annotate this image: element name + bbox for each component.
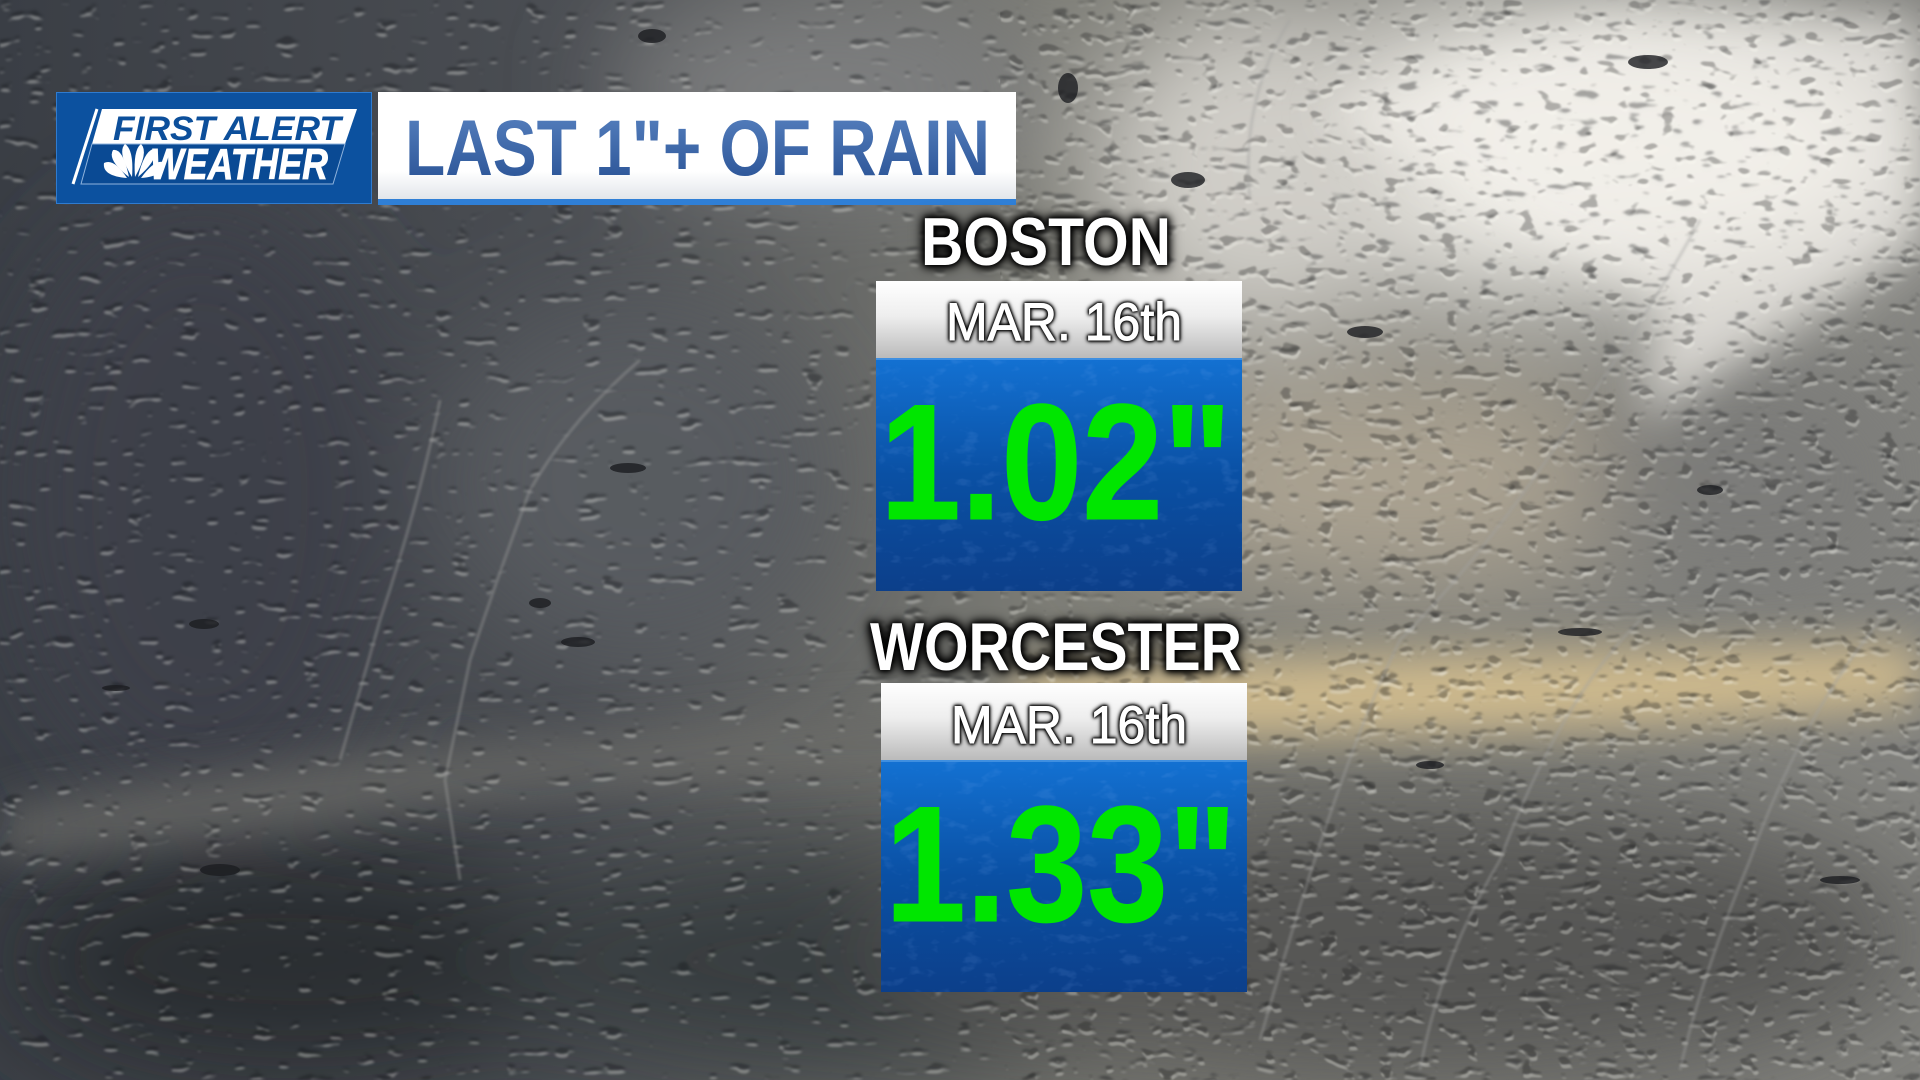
rainfall value: Worcester: 1.33" — [885, 772, 1237, 956]
date: Boston: MAR. 16th — [946, 293, 1182, 352]
logo: First Alert Weather — [56, 92, 372, 204]
panel: Worcester — [870, 609, 1247, 992]
city label: Boston: BOSTON — [921, 204, 1171, 280]
title text: LAST 1"+ OF RAIN — [405, 103, 990, 192]
date: Worcester: MAR. 16th — [951, 696, 1187, 755]
icon: NBC peacock — [104, 144, 163, 178]
rivulets — [340, 20, 1880, 1070]
city label: Worcester: WORCESTER — [870, 609, 1242, 685]
panel: Boston — [876, 204, 1242, 591]
logo: First Alert Weather: WEATHER — [150, 140, 328, 189]
title bar — [378, 92, 1016, 205]
rainfall value: Boston: 1.02" — [880, 370, 1232, 554]
logo: First Alert Weather: FIRST ALERT — [113, 110, 344, 148]
large raindrops — [102, 29, 1860, 884]
